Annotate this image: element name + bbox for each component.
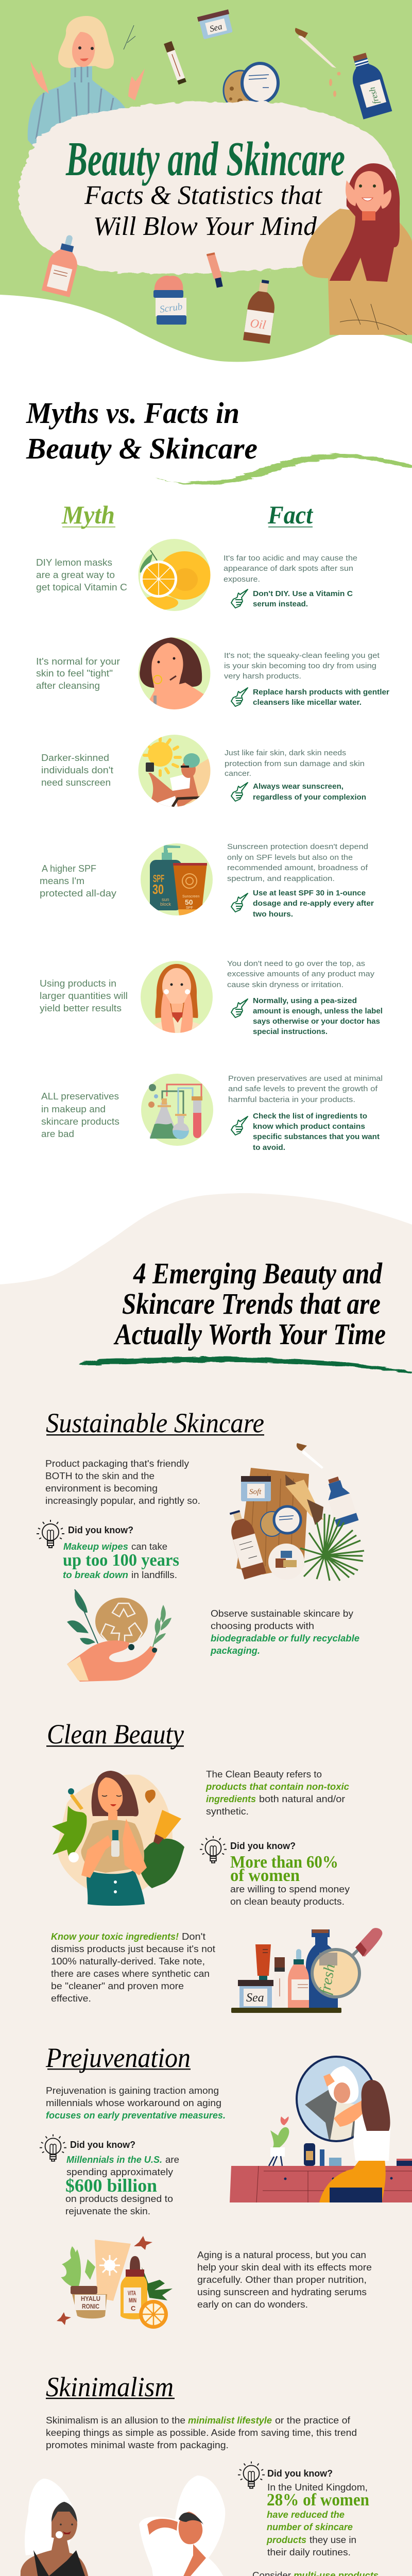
heading: Skinimalism: [46, 2371, 174, 2402]
paragraph: toxic ingredients: 100% naturally-derived. Take note,: [51, 1956, 205, 1967]
fact text: excessive amounts of any product may: [227, 970, 375, 978]
myth text: ALL preservatives: [41, 1091, 119, 1101]
icon: pointing hand: [231, 893, 248, 912]
row 4: higher SPF: [40, 842, 374, 919]
row 1: lemon mask: [36, 539, 357, 612]
did you know: rejuvenate the skin.: [65, 2206, 150, 2216]
paragraph: toxic ingredients: be "cleaner" and proven more: [51, 1981, 184, 1991]
did you know: their daily routines.: [267, 2547, 351, 2557]
paragraph: [205, 1769, 349, 1817]
illustration: bottles and magnifier: [231, 1928, 382, 2013]
icon: sunscreen bottles: SPF: [186, 906, 193, 910]
fact text: [228, 1074, 383, 1104]
tip: [253, 782, 366, 802]
paragraph: focuses on early preventative measures.: [46, 2110, 226, 2121]
paragraph: ingredients: [206, 1794, 256, 1804]
illustration: vanity mirror with woman: [230, 2057, 412, 2202]
did you know: up too 100 years: [63, 1551, 179, 1570]
myth text: [41, 1091, 119, 1139]
paragraph: [197, 2250, 372, 2310]
heading: Clean Beauty: [47, 1719, 184, 1750]
column heading: Fact: Fact: [267, 500, 314, 529]
did you know: [230, 1841, 350, 1907]
did you know: Did you know?: [70, 2140, 135, 2150]
row 6: preservatives: [41, 1074, 383, 1152]
tip: [253, 1112, 380, 1152]
myth text: [40, 978, 128, 1013]
paragraph: toxic ingredients: Know your toxic ingredients!: [51, 1931, 179, 1942]
illustration: vitamin products: [57, 2236, 173, 2329]
illustration: recycling symbol held in hand: [67, 1589, 171, 1682]
hero background: [0, 0, 412, 362]
paragraph: toxic ingredients: dismiss products just because it's not: [51, 1944, 215, 1954]
myth text: after cleansing: [36, 681, 100, 691]
tip: specific substances that you want: [253, 1132, 380, 1141]
icon: sunscreen bottles: 30: [152, 882, 164, 897]
myth text: means I'm: [40, 876, 84, 886]
icon: light bulb: [238, 2462, 265, 2488]
section: clean beauty: [46, 1719, 382, 2013]
icon: pointing hand: [231, 783, 248, 801]
tip: to avoid.: [253, 1143, 285, 1152]
section: prejuvenation: [40, 2042, 412, 2329]
illustration: bottles and magnifier: Sea: [246, 1991, 264, 2005]
illustration: vitamin products: VITA: [128, 2290, 136, 2297]
fact text: [225, 749, 365, 778]
icon: light bulb: [40, 2134, 66, 2161]
tip: regardless of your complexion: [253, 793, 366, 802]
fact text: recommended amount, broadness of: [227, 863, 368, 872]
myth text: individuals don't: [41, 765, 113, 775]
paragraph: millennials whose workaround on aging: [46, 2098, 221, 2108]
icon: light bulb: [200, 1836, 227, 1863]
icon: pointing hand: [231, 1116, 248, 1135]
fact text: [227, 959, 375, 989]
illustration: bottles and magnifier: fresh: [316, 1962, 338, 1995]
myth text: skincare products: [41, 1116, 119, 1127]
fact text: is your skin becoming too dry from using: [224, 662, 376, 670]
column heading: Myth: Myth: [61, 500, 115, 529]
tip: Check the list of ingredients to: [253, 1112, 367, 1121]
woman with blonde hair: [28, 16, 145, 149]
icon: sunscreen bottles: sun: [162, 897, 169, 902]
tip: [253, 889, 374, 919]
did you know: In the United Kingdom,: [267, 2482, 368, 2493]
did you know: Millennials in the U.S.: [66, 2155, 162, 2165]
paragraph: toxic ingredients: [51, 1931, 215, 2004]
fact text: [224, 651, 380, 681]
tip: Don't DIY. Use a Vitamin C: [253, 589, 353, 598]
paragraph: BOTH to the skin and the: [45, 1471, 154, 1481]
fact text: harmful bacteria in your products.: [228, 1095, 355, 1104]
icon: light bulb: [37, 1520, 64, 1548]
tip: says otherwise or your doctor has: [253, 1017, 380, 1026]
paragraph: Observe sustainable skincare by: [211, 1608, 353, 1619]
did you know: are: [165, 2155, 179, 2165]
tip: two hours.: [253, 910, 293, 919]
paragraph: environment is becoming: [45, 1483, 158, 1494]
fact text: exposure.: [224, 575, 260, 584]
did you know: can take: [131, 1541, 167, 1552]
did you know: on products designed to: [65, 2194, 173, 2204]
did you know: Makeup wipes: [63, 1541, 128, 1552]
myth text: Darker-skinned: [41, 753, 109, 763]
tip: [253, 688, 389, 707]
did you know: spending approximately: [66, 2167, 173, 2177]
illustration: vitamin products: HYALU: [81, 2295, 100, 2302]
myth text: protected all-day: [40, 888, 116, 899]
did you know: [63, 1525, 179, 1580]
icon: woman sunbathing: [138, 735, 211, 811]
title: Will Blow Your Mind: [93, 212, 317, 241]
did you know: Did you know?: [68, 1525, 133, 1535]
paragraph: toxic ingredients: Don't: [182, 1931, 205, 1942]
illustration: skincare flat lay: Soft: [249, 1488, 262, 1496]
illustration: vitamin products: C: [131, 2304, 136, 2312]
myth text: need sunscreen: [41, 777, 111, 788]
myth text: larger quantities will: [40, 991, 128, 1001]
jar labelled Sea: [197, 9, 234, 40]
tip: amount is enough, unless the label: [253, 1007, 383, 1015]
did you know: [266, 2468, 369, 2557]
cream section background: [0, 1193, 412, 2576]
icon: woman touching face: [138, 637, 211, 710]
tip: know which product contains: [253, 1122, 365, 1131]
paragraph: [210, 1608, 359, 1656]
icon: pointing hand: [231, 589, 248, 608]
icon: pointing hand: [231, 688, 248, 706]
paragraph: help your skin deal with its effects more: [197, 2262, 372, 2273]
small pink tube: [207, 252, 224, 289]
paragraph: Skinimalism is an allusion to the: [46, 2415, 185, 2426]
section: sustainable skincare: [37, 1408, 364, 1682]
did you know: are willing to spend money: [230, 1884, 350, 1894]
tip: [253, 589, 353, 608]
icon: lemon circle: [138, 539, 211, 612]
fact text: It's not; the squeaky-clean feeling you get: [224, 651, 380, 660]
paragraph: Aging is a natural process, but you can: [197, 2250, 366, 2260]
fact text: You don't need to go over the top, as: [227, 959, 365, 968]
jar labelled Sea: Sea: [209, 21, 223, 34]
paragraph: packaging.: [210, 1646, 260, 1656]
brush stroke: dark green: [79, 1357, 412, 1374]
did you know: of women: [230, 1866, 300, 1885]
fact text: spectrum, and reapplication.: [227, 874, 335, 883]
row 3: sunscreen for dark skin: [41, 735, 366, 811]
fact text: [224, 554, 357, 584]
myth text: DIY lemon masks: [36, 557, 112, 568]
paragraph: [46, 2086, 226, 2121]
paragraph: products that contain non-toxic: [205, 1782, 349, 1792]
pink dropper bottle: [42, 232, 84, 297]
heading: 4 emerging trends: [113, 1257, 386, 1351]
section: skinimalism: [20, 2371, 379, 2576]
myth text: in makeup and: [41, 1104, 106, 1114]
paragraph: [252, 2570, 379, 2576]
myth text: yield better results: [40, 1003, 122, 1013]
myth text: It's normal for your: [36, 656, 120, 667]
tip: special instructions.: [253, 1027, 328, 1036]
did you know: 28% of women: [267, 2490, 369, 2510]
illustration: vitamin products: MIN: [129, 2297, 136, 2304]
heading: Sustainable Skincare: [46, 1408, 264, 1438]
myth text: get topical Vitamin C: [36, 582, 127, 592]
paragraph: synthetic.: [206, 1806, 249, 1817]
paragraph: biodegradable or fully recyclable: [211, 1633, 359, 1643]
fact text: Proven preservatives are used at minimal: [228, 1074, 383, 1083]
fact text: only on SPF levels but also on the: [227, 853, 353, 862]
illustration: skincare flat lay: [226, 1443, 364, 1581]
icon: sunscreen bottles: Sunscreen: [182, 895, 200, 899]
icon: lab flasks: [141, 1074, 213, 1146]
paragraph: early on can do wonders.: [197, 2299, 308, 2310]
illustration: vitamin products: RONIC: [82, 2302, 99, 2310]
myth text: [41, 753, 113, 788]
paragraph: gracefully. Other than proper nutrition,: [197, 2275, 367, 2285]
fact text: [227, 842, 368, 883]
title: [65, 132, 345, 241]
paragraph: increasingly popular, and rightly so.: [45, 1496, 200, 1506]
did you know: [65, 2140, 179, 2216]
did you know: Did you know?: [230, 1841, 296, 1851]
heading: myths vs facts: [26, 396, 258, 465]
myth text: A higher SPF: [42, 863, 96, 874]
blue bottle labelled fresh: fresh: [367, 86, 381, 105]
oil bottle: [243, 278, 278, 344]
row 5: larger quantities: [40, 959, 383, 1036]
heading: Prejuvenation: [45, 2042, 191, 2073]
myth text: are a great way to: [36, 570, 115, 580]
fact text: protection from sun damage and skin: [225, 759, 365, 768]
myth text: [36, 656, 120, 691]
scrub jar: Scrub: [159, 301, 183, 315]
paragraph: using sunscreen and hydrating serums: [197, 2287, 367, 2297]
heading: myths vs facts: Myths vs. Facts in: [26, 396, 239, 430]
tip: Replace harsh products with gentler: [253, 688, 389, 697]
did you know: to break down: [63, 1570, 128, 1580]
icon: sunscreen bottles: block: [160, 902, 171, 907]
heading: myths vs facts: Beauty & Skincare: [26, 432, 258, 465]
paragraph: choosing products with: [211, 1621, 314, 1631]
illustration: woman with serum: [52, 1771, 184, 1906]
icon: sunscreen bottles: 50: [185, 898, 193, 906]
icon: sunscreen bottles: [141, 843, 213, 916]
tip: Use at least SPF 30 in 1-ounce: [253, 889, 366, 897]
blue bottle labelled fresh: [346, 50, 392, 120]
myth text: [36, 557, 127, 592]
did you know: $600 billion: [65, 2175, 157, 2196]
title: Facts & Statistics that: [84, 181, 323, 210]
woman with red hair: [302, 163, 412, 335]
fact text: It's far too acidic and may cause the: [224, 554, 357, 563]
oil bottle: Oil: [249, 317, 267, 332]
did you know: they use in: [310, 2535, 356, 2545]
tip: cleansers like micellar water.: [253, 698, 362, 707]
did you know: have reduced the: [267, 2510, 345, 2520]
paragraph: toxic ingredients: effective.: [51, 1993, 91, 2004]
did you know: on clean beauty products.: [230, 1896, 345, 1907]
paragraph: [46, 2415, 357, 2450]
tip: serum instead.: [253, 600, 308, 608]
fact text: Just like fair skin, dark skin needs: [225, 749, 346, 757]
fact text: and safe levels to prevent the growth of: [228, 1084, 378, 1093]
tip: dosage and re-apply every after: [253, 899, 374, 908]
dropper with drops: [295, 28, 341, 97]
tip: Always wear sunscreen,: [253, 782, 344, 791]
paragraph: or the practice of: [275, 2415, 351, 2426]
row 2: tight skin: [36, 637, 389, 710]
myth text: skin to feel "tight": [36, 668, 113, 679]
paragraph: both natural and/or: [259, 1794, 345, 1804]
title: Beauty and Skincare: [65, 132, 345, 186]
paragraph: [45, 1459, 200, 1506]
icon: pointing hand: [231, 999, 248, 1018]
paragraph: minimalist lifestyle: [188, 2415, 272, 2426]
paragraph: Product packaging that's friendly: [45, 1459, 189, 1469]
paragraph: The Clean Beauty refers to: [206, 1769, 322, 1780]
fact text: Sunscreen protection doesn't depend: [227, 842, 368, 851]
fact text: cancer.: [225, 769, 251, 778]
did you know: Did you know?: [267, 2468, 333, 2479]
paragraph: keeping things as simple as possible. Aside from saving time, this trend: [46, 2428, 357, 2438]
tip: Normally, using a pea-sized: [253, 996, 357, 1005]
icon: woman applying cream: [141, 961, 213, 1033]
did you know: More than 60%: [230, 1853, 338, 1872]
did you know: number of skincare: [267, 2522, 353, 2532]
small brown tube: [164, 41, 186, 84]
compact powder: [224, 63, 278, 110]
myth text: Using products in: [40, 978, 116, 989]
brush stroke: light green: [155, 454, 412, 485]
myth text: are bad: [41, 1129, 74, 1139]
cream title blob: [19, 102, 397, 274]
scrub jar: [153, 276, 186, 325]
myth text: [40, 863, 116, 899]
paragraph: Prejuvenation is gaining traction among: [46, 2086, 219, 2096]
fact text: appearance of dark spots after sun: [224, 564, 353, 573]
did you know: products: [266, 2535, 306, 2545]
illustration: two women in towels: [20, 2476, 233, 2576]
fact text: cause skin dryness or irritation.: [227, 980, 344, 989]
tip: [253, 996, 383, 1036]
paragraph: toxic ingredients: there are cases where synthetic can: [51, 1969, 210, 1979]
paragraph: promotes minimal waste from packaging.: [46, 2440, 229, 2450]
did you know: in landfills.: [131, 1570, 177, 1580]
icon: sunscreen bottles: SPF: [153, 873, 164, 885]
fact text: very harsh products.: [224, 672, 301, 681]
